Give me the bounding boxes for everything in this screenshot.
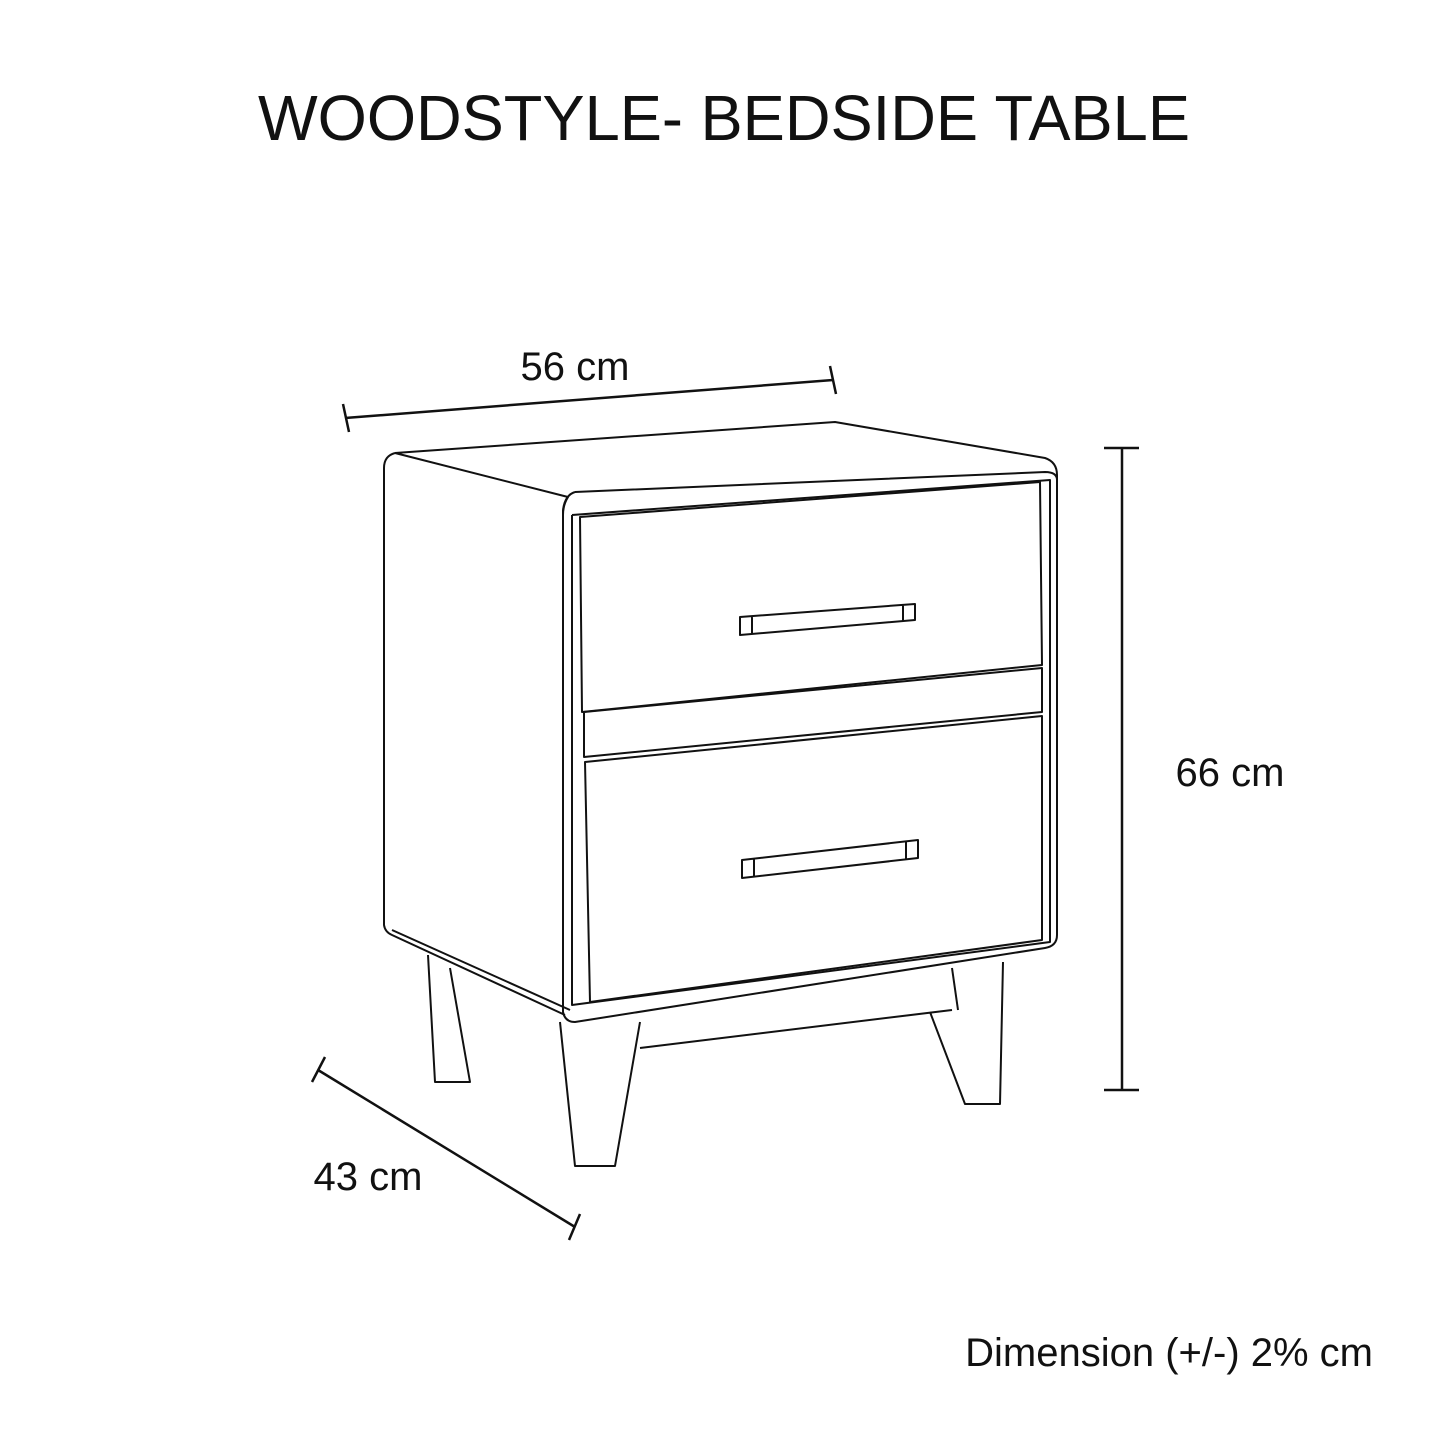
bedside table drawing — [384, 422, 1057, 1166]
dimension: width 56 cm — [343, 366, 836, 432]
bottom drawer — [585, 716, 1042, 1002]
table top — [384, 422, 1057, 515]
handle: bottom drawer — [742, 840, 918, 878]
dimension: depth 43 cm — [312, 1057, 580, 1240]
front frame — [563, 475, 1057, 1022]
left side panel — [384, 468, 570, 1015]
label: 43 cm: 43 cm — [314, 1155, 422, 1199]
dimension: height 66 cm — [1104, 448, 1139, 1090]
note: dimension tolerance: Dimension (+/-) 2% cm — [965, 1331, 1373, 1375]
handle: top drawer — [740, 604, 915, 635]
label: 56 cm: 56 cm — [521, 345, 629, 389]
top drawer — [580, 482, 1042, 757]
title: WOODSTYLE- BEDSIDE TABLE — [258, 82, 1190, 154]
legs — [428, 955, 1003, 1166]
label: 66 cm: 66 cm — [1176, 751, 1284, 795]
